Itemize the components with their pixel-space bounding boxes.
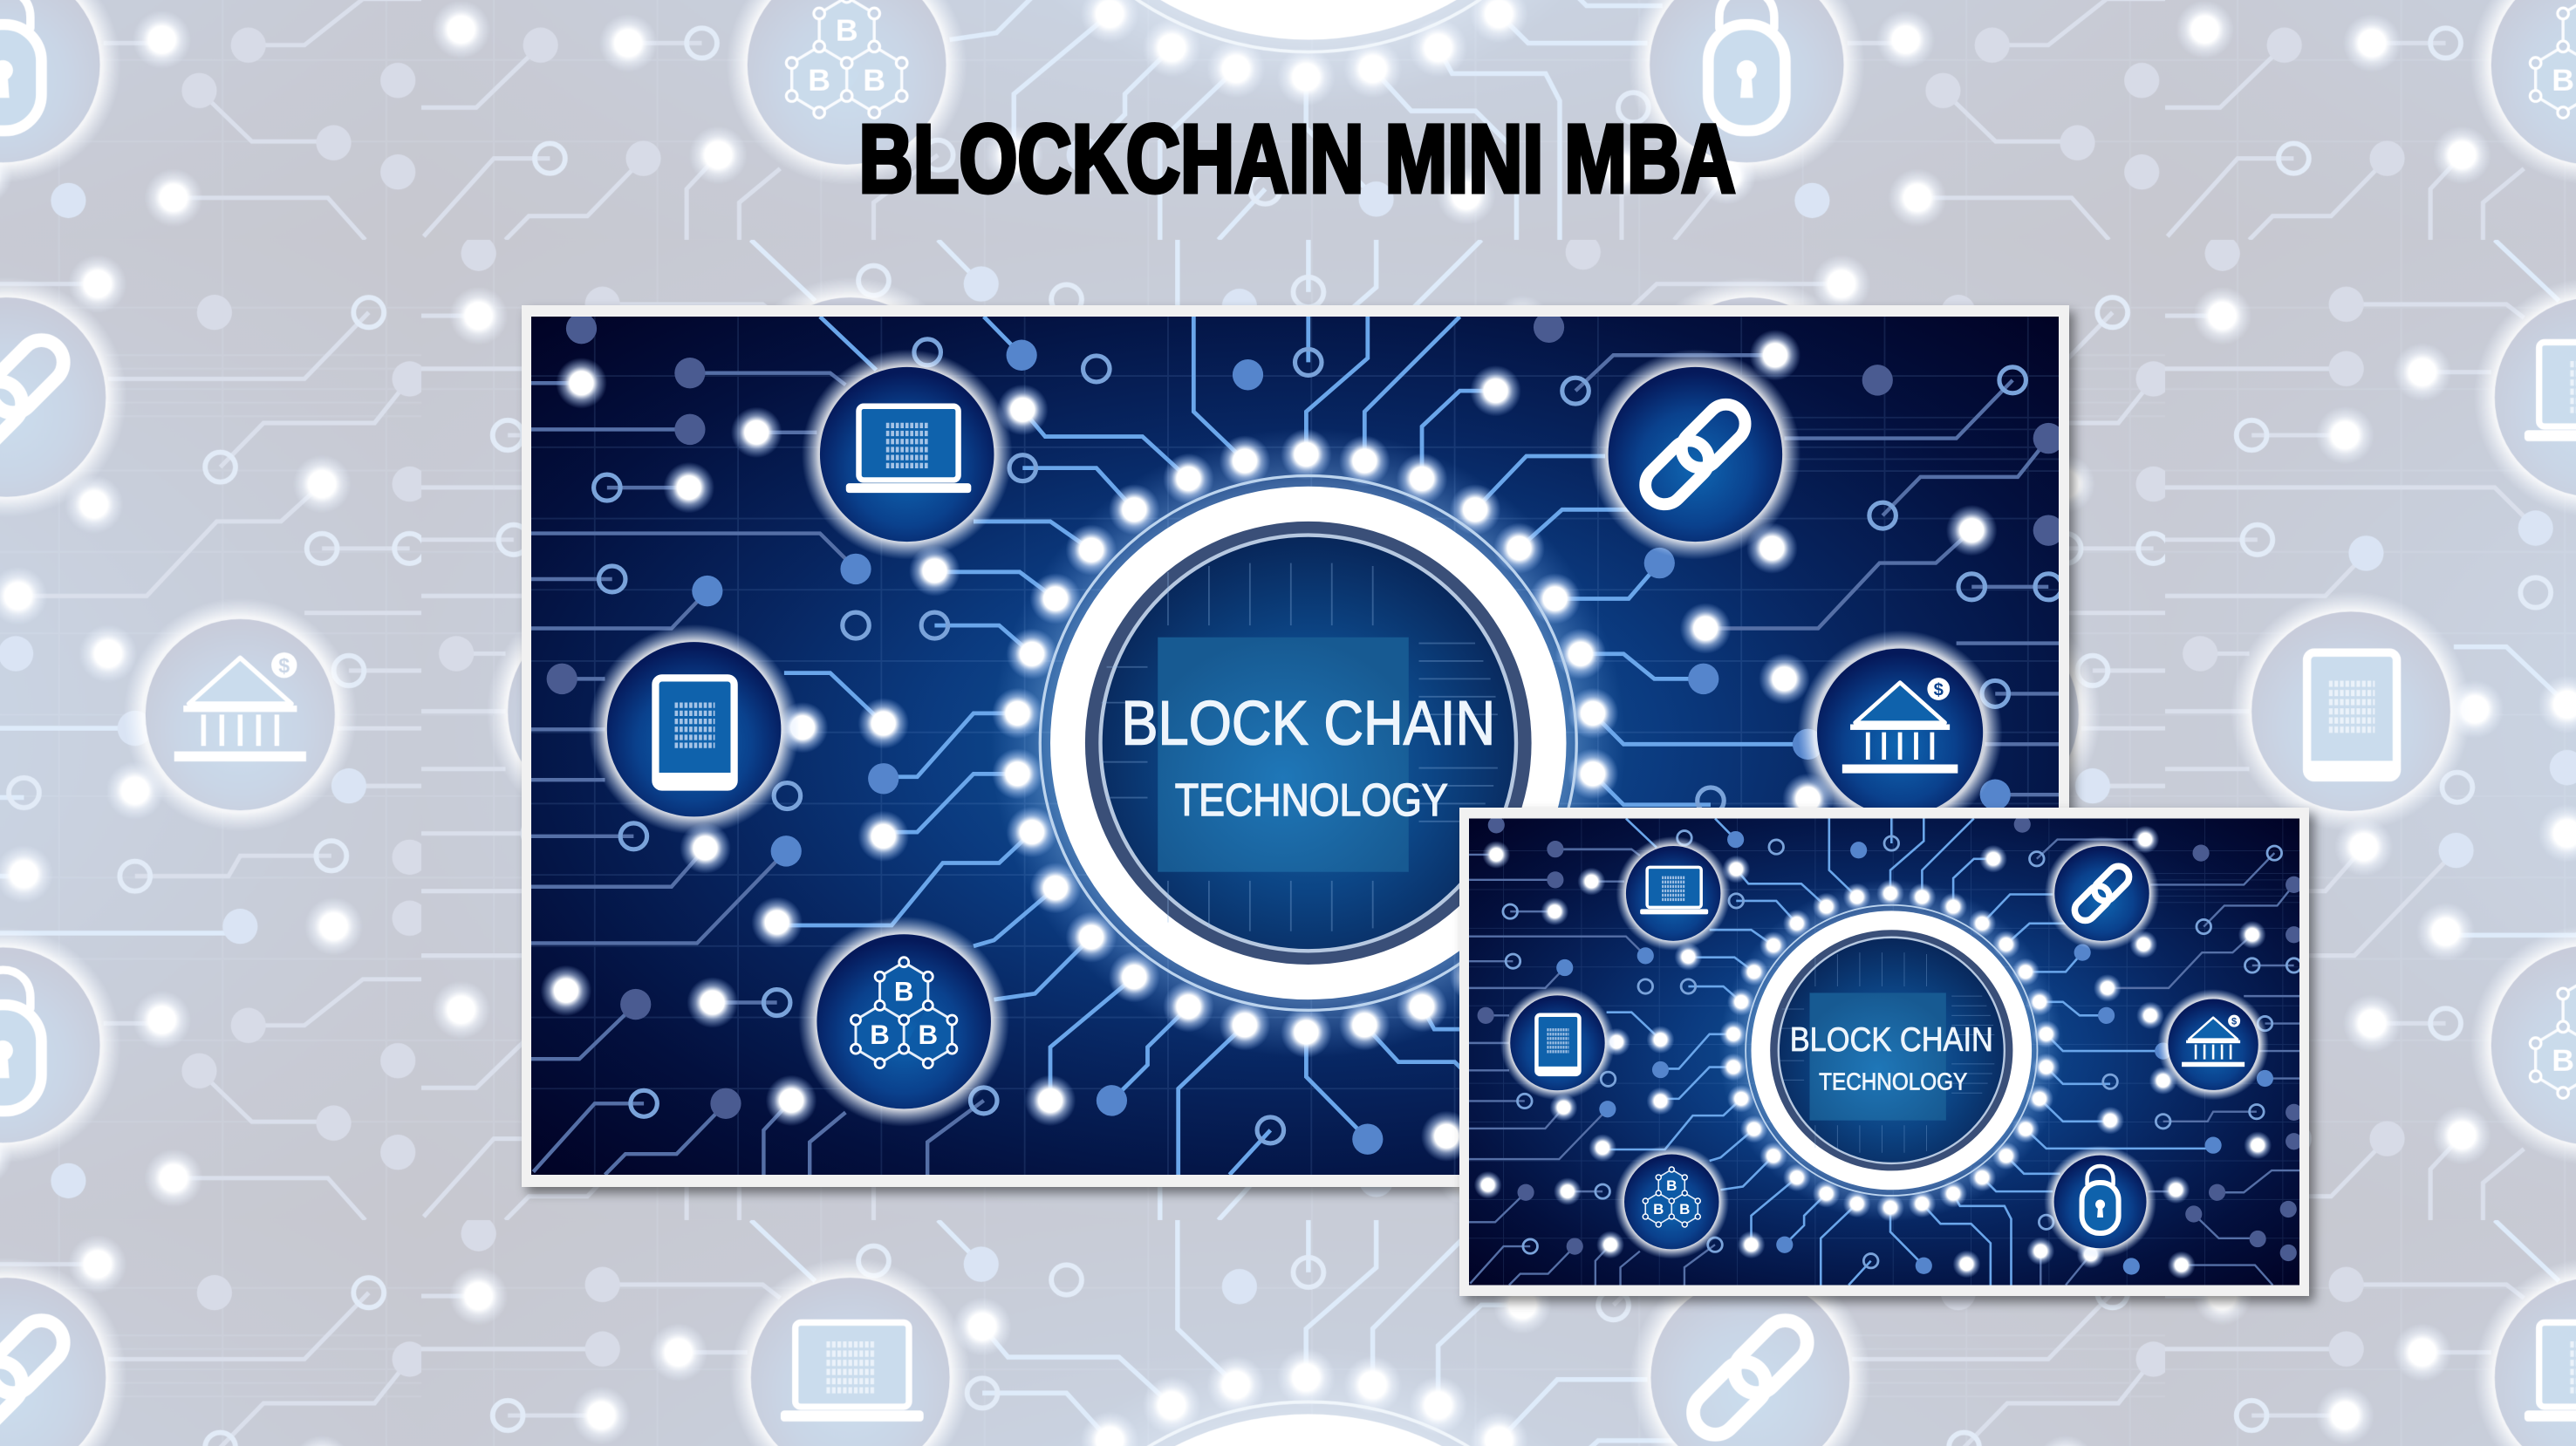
icon circle: bitcoin blocks: B [870, 1020, 890, 1050]
icon circle: bitcoin blocks: B [918, 1020, 938, 1050]
icon circle: padlock [1589, 918, 1795, 1125]
central emblem: ring with block chain label [1040, 475, 1576, 1010]
panel: small blockchain technology image [1459, 808, 2309, 1296]
glowing white nodes [541, 330, 2007, 1163]
circuit traces [531, 317, 2059, 1175]
icon circle: bitcoin blocks: B [894, 976, 913, 1006]
icon circle: chain link [1589, 349, 1800, 560]
icon circle: bank with dollar badge [1798, 631, 2002, 835]
title: BLOCKCHAIN MINI MBA [858, 106, 1736, 213]
icon circle: tablet [589, 624, 799, 835]
central emblem: ring with block chain label: TECHNOLOGY [1175, 774, 1448, 825]
icon circle: bitcoin blocks [798, 917, 1009, 1127]
icon circle: bank with dollar badge: $ [1934, 680, 1944, 699]
panel: large blockchain technology image [522, 305, 2069, 1187]
circuit nodes: blue and dim dots, open rings [547, 312, 2064, 1156]
icon circle: laptop [802, 349, 1013, 560]
central emblem: ring with block chain label: BLOCK CHAIN [1121, 688, 1495, 758]
